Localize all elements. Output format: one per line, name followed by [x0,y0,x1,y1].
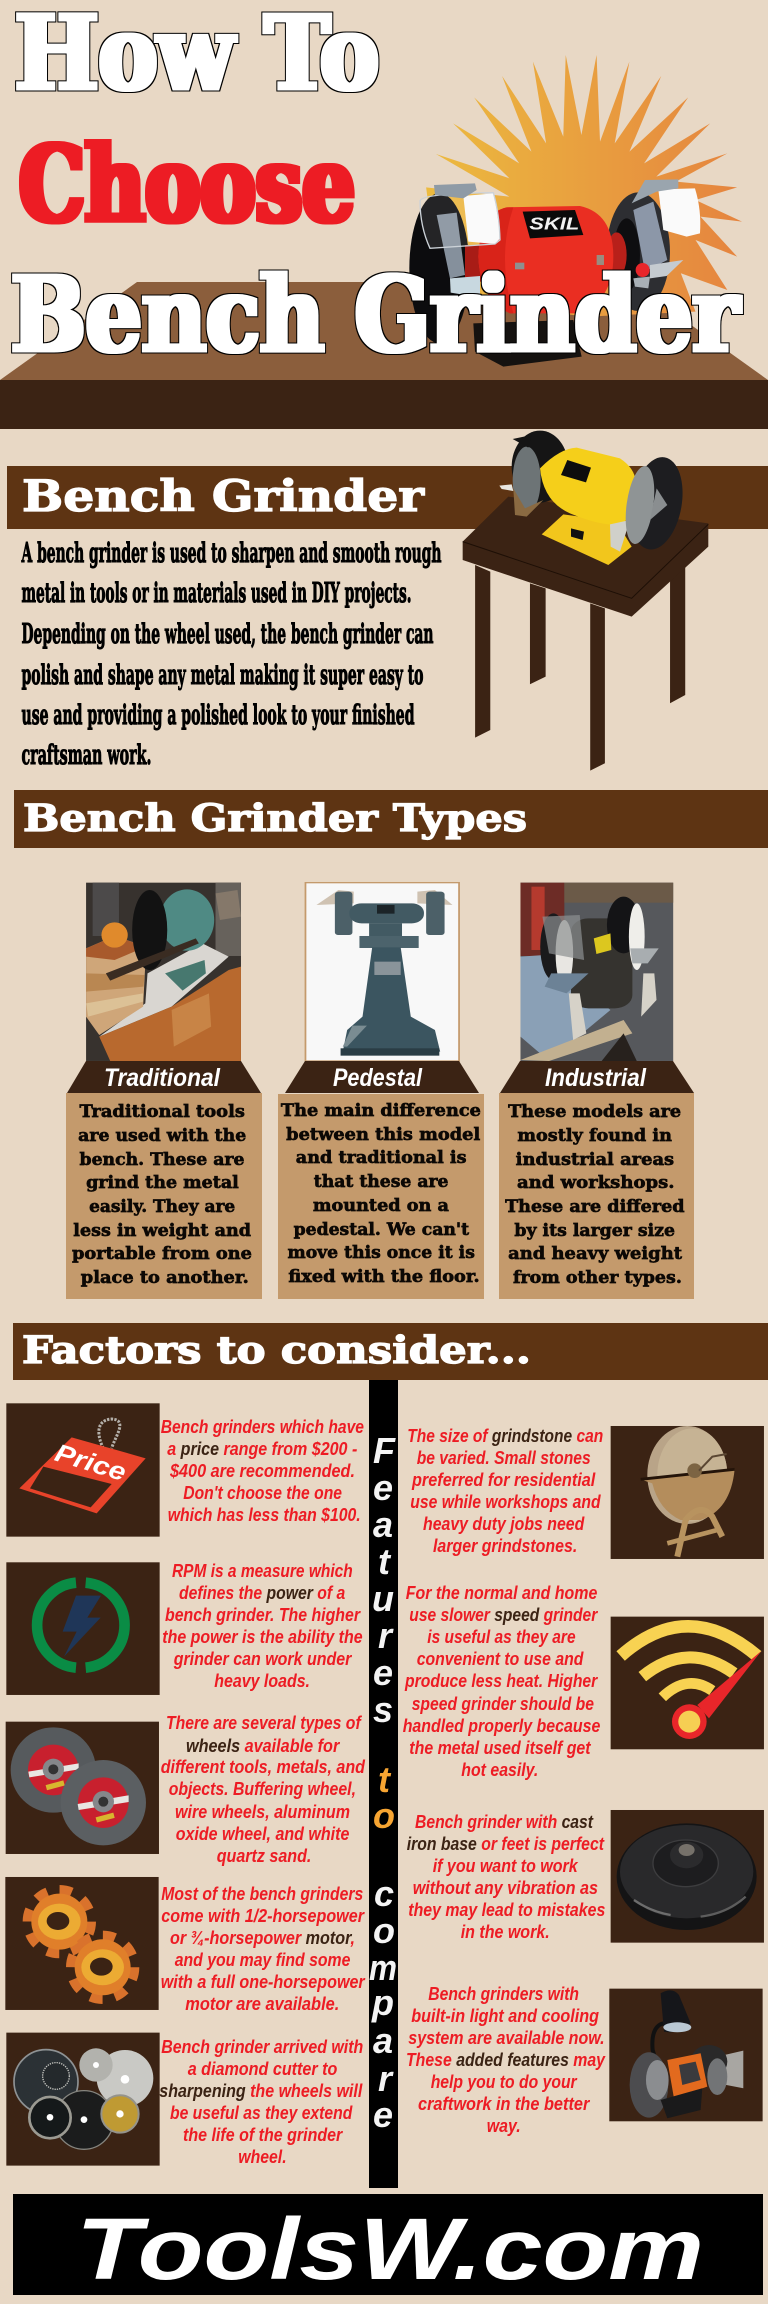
panel: Pedestal type [278,883,484,1299]
text: motor: Most of the bench grinders [161,1884,363,1904]
factor: grindstone [407,1426,764,1559]
vertical banner: Features to compare [369,1380,398,2188]
text: cast iron base [407,1812,605,1942]
text: added features: help you to do your [431,2072,578,2092]
vertical banner: Features to compare: r [378,1615,394,1656]
text box: Industrial: These models are [508,1102,681,1122]
text: sharpening: be useful as they extend [170,2103,353,2123]
vertical banner: Features to compare: e [373,1652,393,1693]
text: price: Don't choose the one [183,1483,342,1503]
text: speed: speed grinder should be [412,1694,594,1714]
text box: Traditional: are used with the [78,1126,246,1146]
text box: Pedestal [278,1094,484,1299]
sun burst [426,55,742,317]
factor: speed [403,1583,764,1780]
text: grindstone: be varied. Small stones [417,1448,591,1468]
text block: bench grinder definition: craftsman work. [22,740,152,771]
text: speed: For the normal and home [406,1583,597,1603]
banner: Traditional: Traditional [104,1064,221,1092]
text box: Industrial: industrial areas [516,1150,674,1170]
text box: Traditional [66,1093,262,1299]
factor: sharpening [6,2033,363,2167]
photo: industrial grinder [520,883,673,1061]
text box: Industrial: and heavy weight [508,1244,682,1264]
text box: Industrial: These are differed [505,1197,685,1217]
factor: price [6,1403,364,1537]
text box: Industrial [499,1093,694,1299]
text: cast iron base: in the work. [461,1922,550,1942]
vertical banner: Features to compare: o [373,1795,395,1836]
text: price [161,1417,364,1525]
footer: ToolsW.com: ToolsW.com [76,2201,704,2298]
icon: diamond cutter discs [6,2033,160,2166]
text box: Traditional: place to another. [81,1268,249,1288]
text box: Pedestal: move this once it is [288,1243,475,1263]
heading bar: Bench Grinder Types: Bench Grinder Types [23,796,527,840]
text: grindstone: The size of grindstone can [407,1426,603,1446]
heading bar: Bench Grinder Types [14,790,768,848]
text: added features: built-in light and cooling [411,2006,599,2026]
text: cast iron base: without any vibration as [413,1878,598,1898]
factor: added features [406,1984,763,2136]
vertical banner: Features to compare: m [369,1947,397,1988]
factor: motor [5,1877,366,2014]
text: power: grinder can work under [173,1649,352,1669]
heading bar: Factors to consider: Factors to consider... [22,1328,531,1372]
text: speed: produce less heat. Higher [404,1671,598,1691]
text: added features: These added features may [406,2050,606,2070]
text box: Traditional: less in weight and [73,1221,251,1241]
text: cast iron base: Bench grinder with cast [415,1812,594,1832]
icon: cast iron base [611,1810,764,1943]
text: motor [161,1884,366,2014]
icon: grinding wheels [6,1722,159,1854]
text: grindstone: use while workshops and [410,1492,601,1512]
red SKIL bench grinder: SKIL [529,213,579,233]
heading line: Choose: Choose [19,122,355,246]
factor: power [6,1561,363,1695]
text: grindstone: preferred for residential [411,1470,596,1490]
text: grindstone: larger grindstones. [433,1536,577,1556]
factor: wheels [6,1713,366,1866]
text box: Industrial: from other types. [513,1268,682,1288]
icon: price tag: Price [52,1439,129,1487]
text block: bench grinder definition: use and providing a polished look to your finished [22,700,415,731]
text: speed: convenient to use and [417,1649,584,1669]
text: grindstone [407,1426,603,1556]
vertical banner: Features to compare: p [371,1982,394,2023]
text: wheels: wire wheels, aluminum [175,1802,350,1822]
vertical banner: Features to compare: t [378,1759,392,1800]
photo: traditional grinder [86,883,241,1061]
vertical banner: Features to compare: r [378,2058,394,2099]
banner: Pedestal: Pedestal [333,1064,423,1092]
text: cast iron base: if you want to work [433,1856,579,1876]
panel: Traditional type [66,883,262,1299]
text box: Pedestal: that these are [314,1172,449,1192]
text: sharpening [159,2037,363,2167]
text: power: defines the power of a [179,1583,345,1603]
text: wheels: different tools, metals, and [161,1757,366,1777]
text box: Traditional: grind the metal [86,1173,239,1193]
text: speed: use slower speed grinder [409,1605,598,1625]
text: sharpening: sharpening the wheels will [159,2081,363,2101]
vertical banner: Features to compare: e [373,2094,393,2135]
text: motor: or ¾-horsepower motor, [170,1928,355,1948]
text box: Industrial: mostly found in [517,1126,672,1146]
banner: Traditional [67,1061,261,1093]
hero: title and grinder on table [0,0,768,429]
vertical banner: Features to compare: t [378,1541,392,1582]
text: motor: come with 1/2-horsepower [161,1906,365,1926]
text box: Pedestal: and traditional is [296,1148,466,1168]
vertical banner: Features to compare: s [373,1689,393,1730]
text: wheels: quartz sand. [217,1846,311,1866]
panel: Industrial type [499,883,694,1299]
factor: cast iron base [407,1810,764,1943]
text: added features: craftwork in the better [418,2094,590,2114]
text: speed [403,1583,600,1780]
vertical banner: Features to compare: F [373,1430,396,1471]
panel: bench grinder intro [7,431,768,771]
vertical banner: Features to compare: a [373,2020,393,2061]
text: sharpening: Bench grinder arrived with [161,2037,363,2057]
icon: power ring and bolt [6,1562,160,1695]
text box: Traditional: easily. They are [89,1197,235,1217]
text: motor: motor are available. [185,1994,339,2014]
heading bar: Bench Grinder: Bench Grinder [22,472,426,522]
text: speed: hot easily. [461,1760,538,1780]
icon: orange gears [5,1877,159,2010]
text: sharpening: wheel. [238,2147,287,2167]
icon: antique grindstone [611,1426,764,1559]
vertical banner: Features to compare: e [373,1467,393,1508]
text: wheels: There are several types of [166,1713,362,1733]
text: motor: with a full one-horsepower [161,1972,366,1992]
icon: table with yellow grinder [463,431,708,771]
text: sharpening: a diamond cutter to [188,2059,337,2079]
table front [0,380,768,429]
text block: bench grinder definition [21,538,442,771]
footer: ToolsW.com [13,2194,763,2298]
text: added features: way. [487,2116,521,2136]
text: price: Bench grinders which have [161,1417,364,1437]
text block: bench grinder definition: metal in tools or in materials used in DIY projects. [22,578,412,609]
heading bar: Bench Grinder [7,466,768,529]
text: power: bench grinder. The higher [165,1605,361,1625]
icon: grinder with lamp [609,1989,763,2121]
text: added features: system are available now. [408,2028,605,2048]
text: added features: Bench grinders with [428,1984,579,2004]
table legs [475,560,685,771]
vertical banner: Features to compare: a [373,1504,393,1545]
text: added features [406,1984,606,2136]
text: speed: is useful as they are [427,1627,576,1647]
text box: Pedestal: pedestal. We can't [294,1220,469,1240]
table top [0,282,768,380]
vertical banner: Features to compare: o [373,1910,395,1951]
heading bar: Factors to consider [13,1323,768,1380]
text: grindstone: heavy duty jobs need [423,1514,585,1534]
photo: pedestal grinder [305,883,459,1061]
text box: Pedestal: mounted on a [313,1196,449,1216]
text: speed: the metal used itself get [409,1738,591,1758]
text box: Industrial: and workshops. [517,1173,674,1193]
text: price: which has less than $100. [168,1505,361,1525]
text: speed: handled properly because [403,1716,600,1736]
table top and Stanley grinder [463,431,708,617]
text box: Traditional: portable from one [72,1244,252,1264]
vertical banner: Features to compare: u [372,1578,394,1619]
banner: Industrial: Industrial [545,1064,647,1092]
text: sharpening: the life of the grinder [183,2125,343,2145]
text: wheels: oxide wheel, and white [176,1824,349,1844]
text box: Pedestal: The main difference [281,1101,481,1121]
text: wheels [161,1713,366,1866]
text: power: the power is the ability the [162,1627,363,1647]
banner: Industrial [500,1061,694,1093]
vertical banner: Features to compare: c [374,1873,394,1914]
text box: Traditional: Traditional tools [80,1102,245,1122]
text: wheels: wheels available for [186,1736,340,1756]
icon: price tag [6,1403,160,1537]
text: cast iron base: iron base or feet is perfect [407,1834,605,1854]
text box: Pedestal: between this model [286,1125,481,1145]
red SKIL bench grinder [409,179,700,367]
text box: Industrial: by its larger size [514,1221,675,1241]
text: wheels: objects. Buffering wheel, [169,1779,356,1799]
text: price: a price range from $200 - [167,1439,357,1459]
text: power [162,1561,363,1691]
icon: speedometer [611,1617,764,1749]
text: motor: and you may find some [175,1950,350,1970]
text: price: $400 are recommended. [169,1461,355,1481]
text: power: RPM is a measure which [172,1561,353,1581]
text box: Pedestal: fixed with the floor. [288,1267,480,1287]
text box: Traditional: bench. These are [80,1150,245,1170]
text: power: heavy loads. [214,1671,310,1691]
text: cast iron base: they may lead to mistakes [408,1900,605,1920]
banner: Pedestal [285,1061,479,1093]
